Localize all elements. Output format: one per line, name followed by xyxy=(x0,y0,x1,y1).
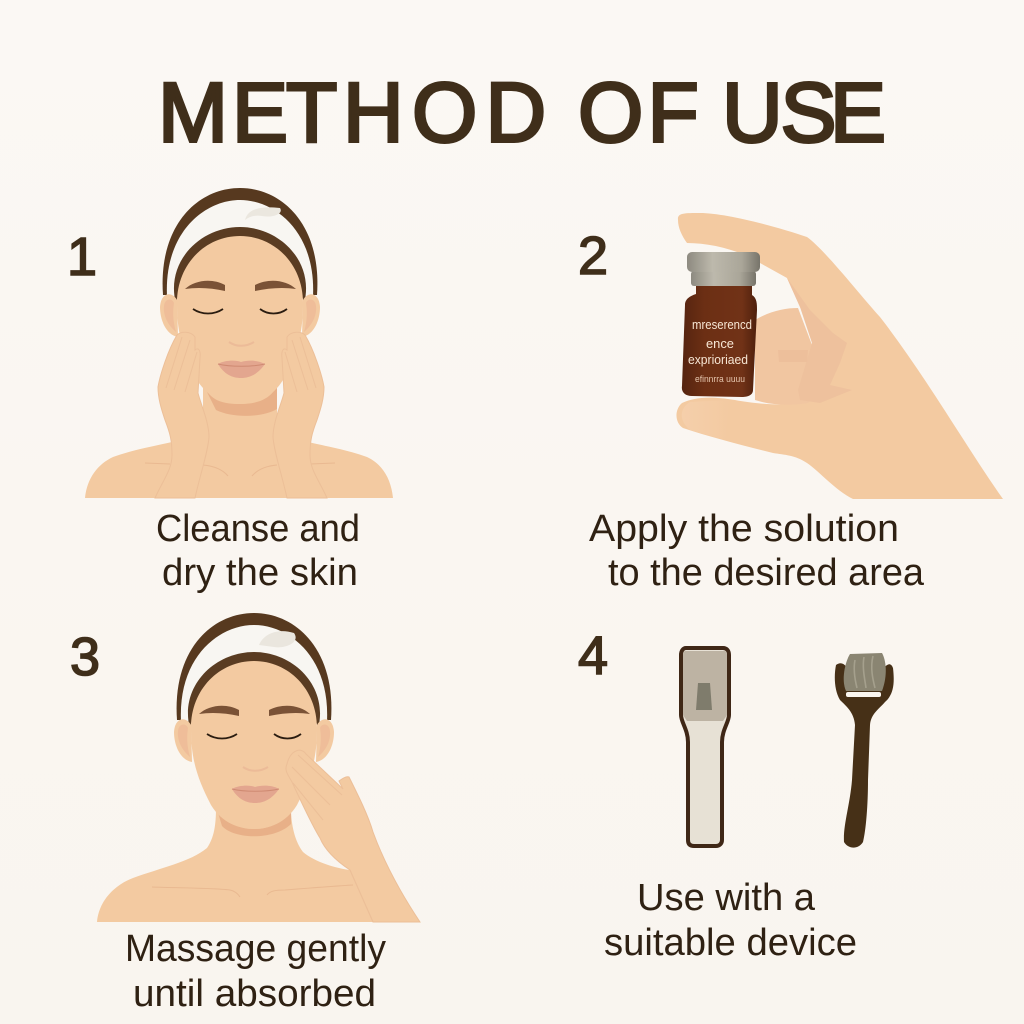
step 2 number: 2 xyxy=(578,226,608,286)
step 3 caption: until absorbed xyxy=(133,973,376,1015)
step 1 caption: dry the skin xyxy=(162,552,358,594)
step 2 caption: to the desired area xyxy=(608,552,925,594)
title: METHOD OF USE xyxy=(158,66,886,160)
step 3 illustration: woman massaging face xyxy=(97,613,420,922)
step 4 caption xyxy=(604,877,857,964)
step 1 caption: Cleanse and xyxy=(156,508,360,550)
vial: ence xyxy=(706,336,734,351)
step 1 number: 1 xyxy=(67,227,97,287)
step 4 number: 4 xyxy=(578,626,608,686)
step 1 caption xyxy=(156,508,360,594)
step 4 illustration: flat device xyxy=(681,648,729,846)
step 2 caption xyxy=(589,508,925,594)
vial: efinnrra uuuu xyxy=(695,374,745,384)
step 1 illustration: woman cleansing face xyxy=(85,188,393,498)
step 2 illustration: hand holding vial xyxy=(676,213,1003,499)
step 3 caption xyxy=(125,928,386,1015)
vial: exprioriaed xyxy=(688,352,748,367)
step 4 caption: suitable device xyxy=(604,922,857,964)
step 4 illustration: derma roller xyxy=(835,653,894,848)
vial xyxy=(682,252,760,397)
vial: mreserencd xyxy=(692,317,752,332)
step 2 caption: Apply the solution xyxy=(589,508,899,550)
step 4 caption: Use with a xyxy=(637,877,816,919)
step 3 caption: Massage gently xyxy=(125,928,386,970)
step 3 number: 3 xyxy=(70,627,100,687)
